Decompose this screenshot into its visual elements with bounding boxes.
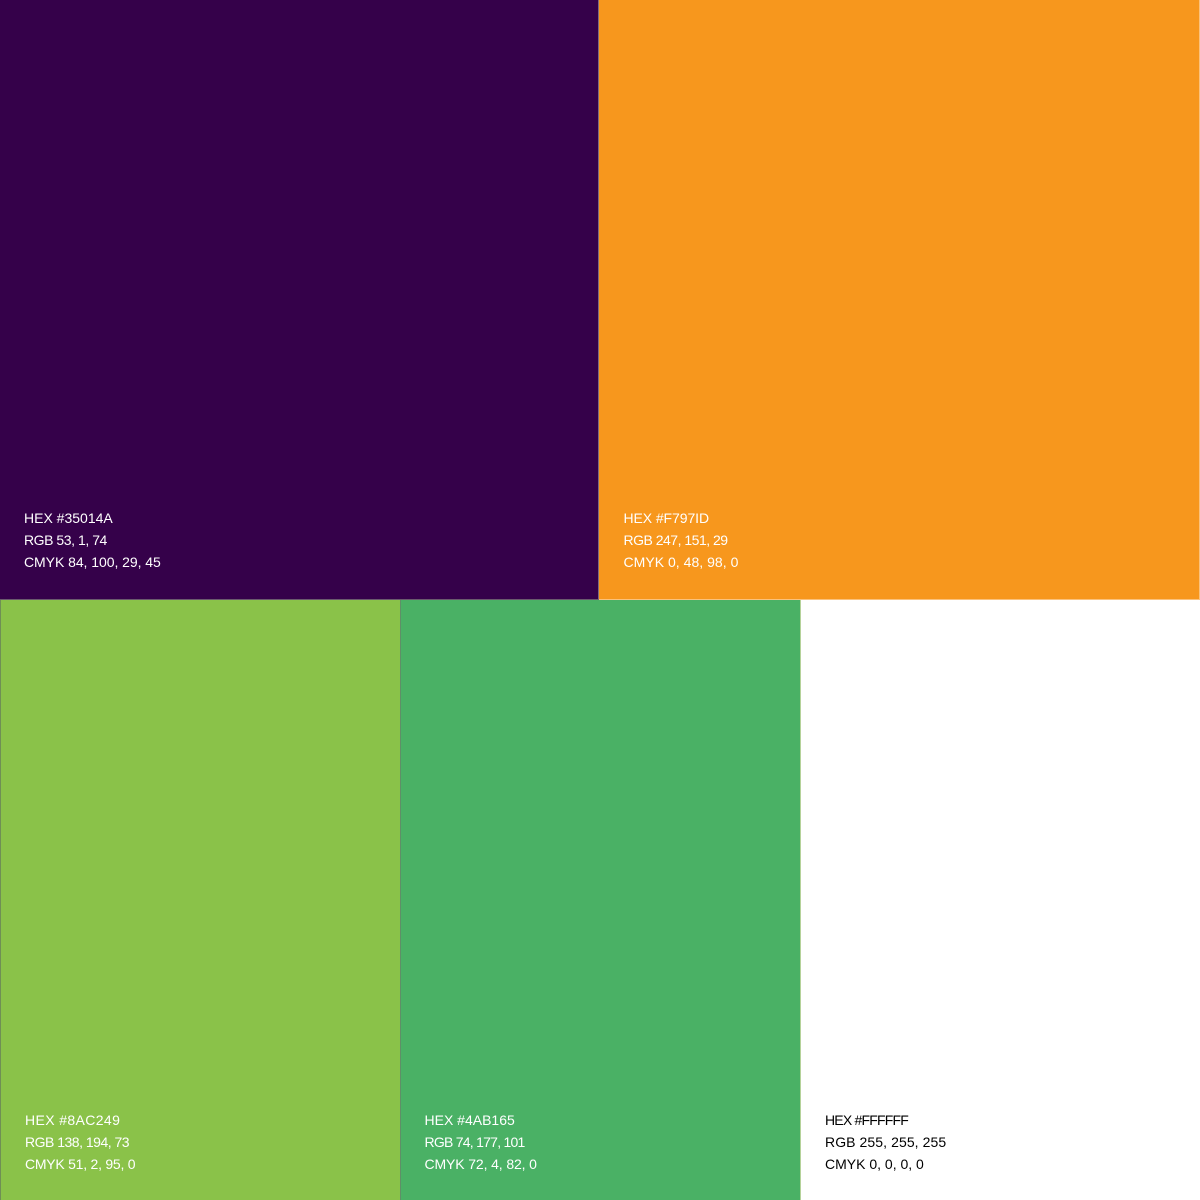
colour values: orange — [624, 510, 738, 570]
swatch: light green — [0, 600, 400, 1200]
colour values: orange: RGB 247, 151, 29 — [624, 532, 728, 548]
colour values: light green — [25, 1112, 135, 1172]
colour values: light green: HEX #8AC249 — [25, 1112, 120, 1128]
colour values: green — [424, 1112, 537, 1172]
colour values: white: HEX #FFFFFF — [825, 1112, 908, 1128]
colour values: dark purple: RGB 53, 1, 74 — [24, 532, 107, 548]
swatch: dark purple — [0, 0, 599, 600]
colour values: white: CMYK 0, 0, 0, 0 — [825, 1156, 924, 1172]
colour values: dark purple: CMYK 84, 100, 29, 45 — [24, 554, 161, 570]
colour values: dark purple — [24, 510, 161, 570]
swatch: green — [400, 600, 800, 1200]
swatch: orange — [599, 0, 1200, 600]
colour values: light green: CMYK 51, 2, 95, 0 — [25, 1156, 135, 1172]
colour values: white — [825, 1112, 946, 1172]
colour values: green: HEX #4AB165 — [424, 1112, 515, 1128]
swatch: white — [800, 600, 1200, 1200]
colour values: green: RGB 74, 177, 101 — [424, 1134, 525, 1150]
colour values: green: CMYK 72, 4, 82, 0 — [424, 1156, 537, 1172]
colour values: dark purple: HEX #35014A — [24, 510, 113, 526]
colour values: white: RGB 255, 255, 255 — [825, 1134, 946, 1150]
colour values: light green: RGB 138, 194, 73 — [25, 1134, 129, 1150]
colour values: orange: HEX #F797ID — [624, 510, 709, 526]
colour values: orange: CMYK 0, 48, 98, 0 — [624, 554, 738, 570]
